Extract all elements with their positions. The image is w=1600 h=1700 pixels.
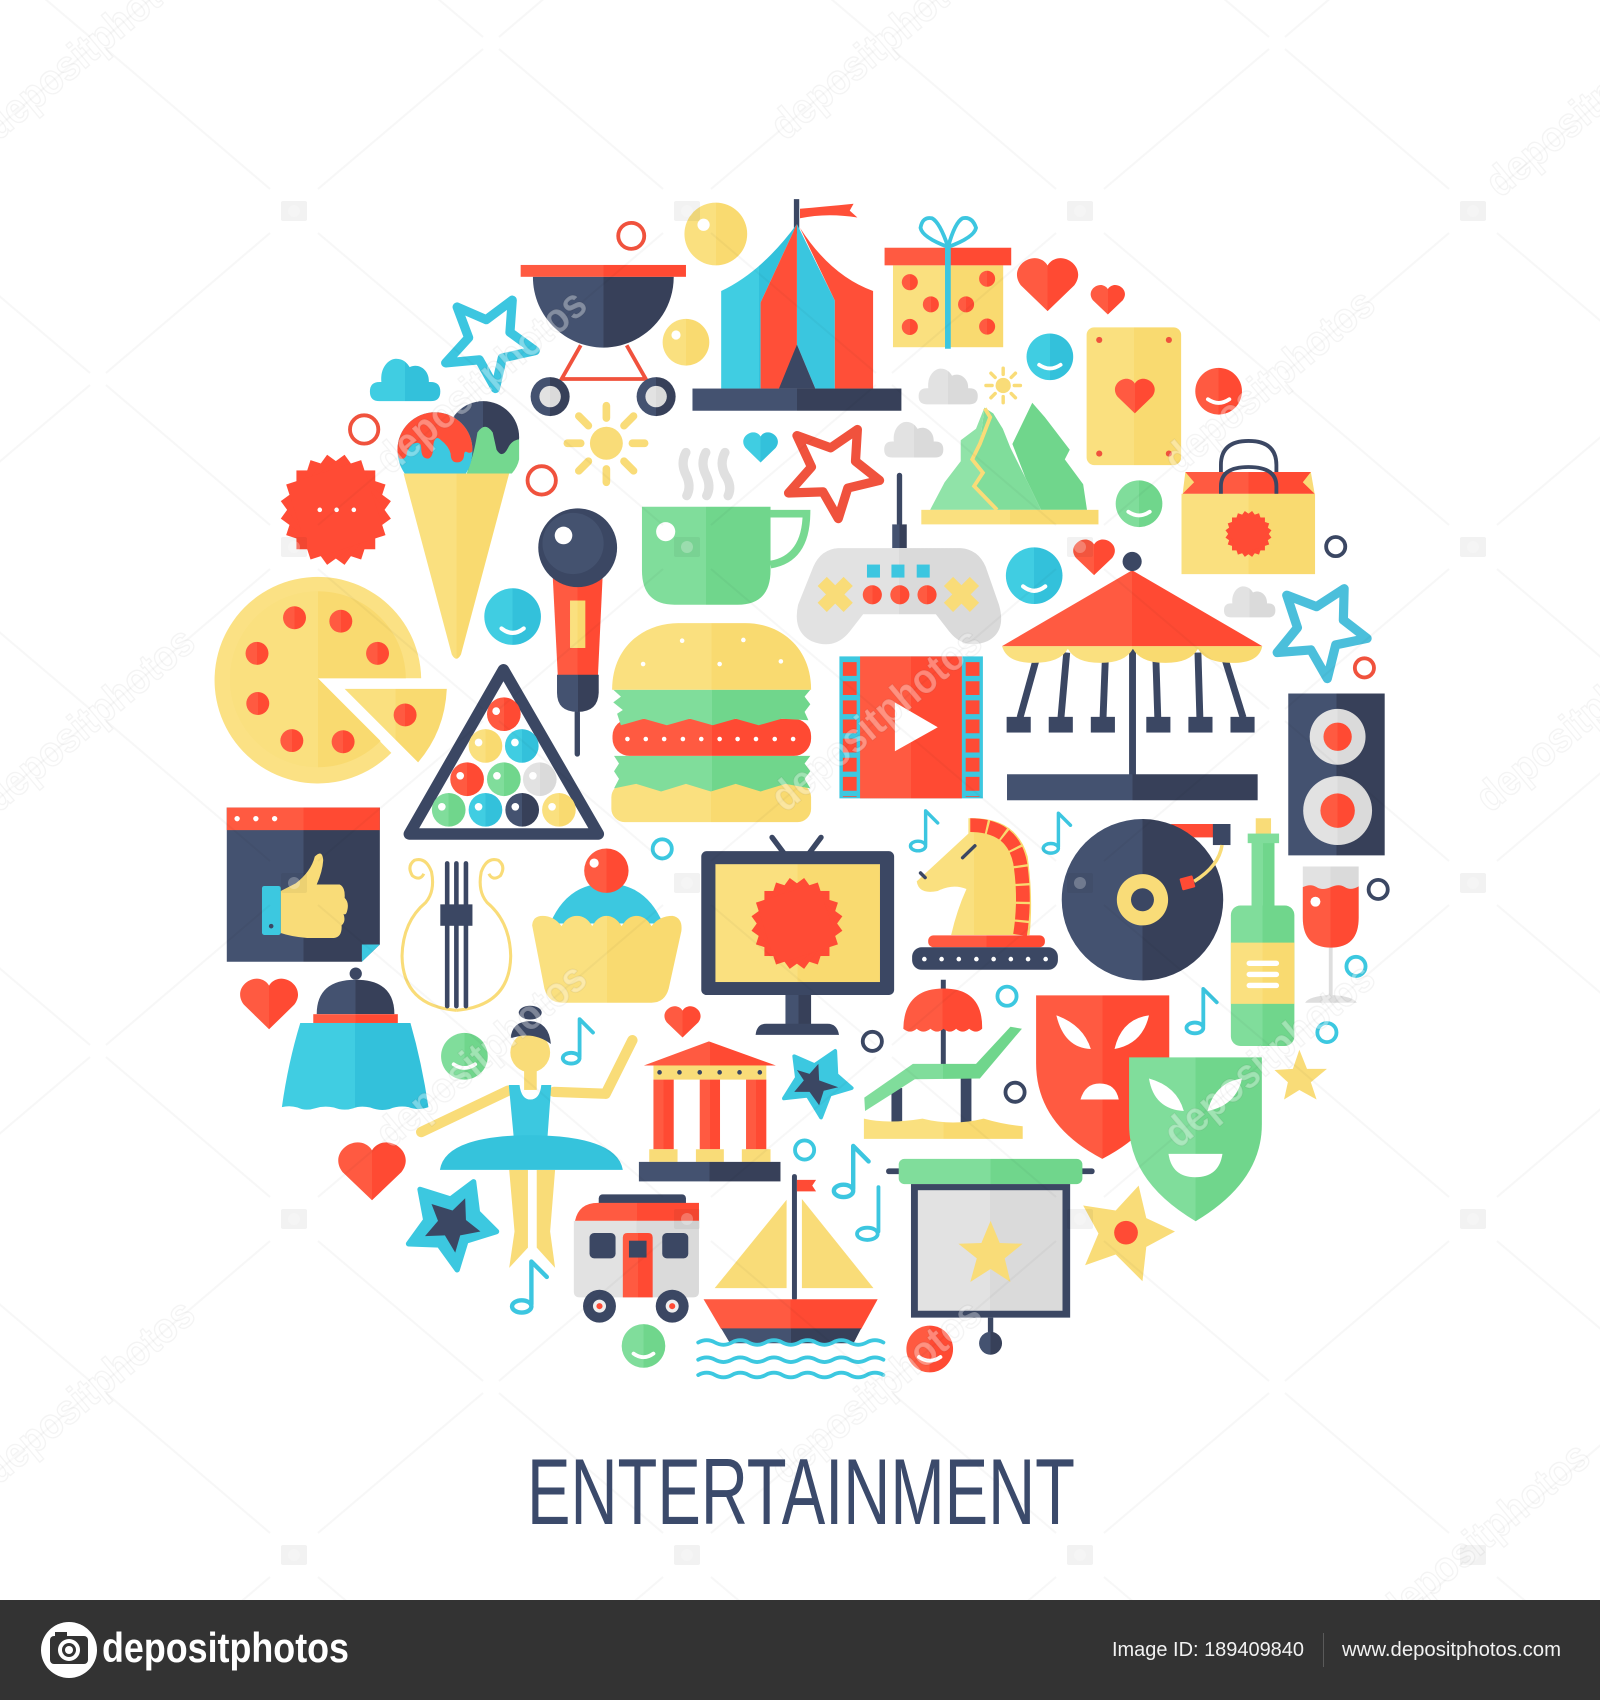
watermarks: depositphotos [761,1289,990,1492]
icon: playing card [1087,327,1181,465]
icon: blue smiley large [1006,547,1062,604]
icon: grey cloud [919,369,978,404]
icon: chess knight [912,818,1058,970]
icon: small red heart [1091,285,1125,315]
icon: temple [639,1041,780,1181]
icon: microphone [538,508,617,757]
footer logo icon [41,1622,97,1678]
icon: music note [563,1019,593,1064]
icon: blue star with navy centre [784,1051,852,1117]
icon: red star outline [789,429,880,519]
footer image id: Image ID: 189409840 [1112,1639,1304,1661]
icon: mountain [921,403,1098,524]
icon: small blue heart [743,432,778,463]
icon: waves [698,1340,883,1377]
ring: navy [1326,537,1345,556]
icon: music note lower [512,1262,547,1313]
icon: film strip with play button [839,656,983,798]
icon: small yellow ball [663,319,709,366]
icon: small yellow star [1274,1050,1327,1100]
icon: red heart small [664,1006,701,1038]
icon: green theatre mask [1129,1057,1262,1221]
icon: green smiley [1116,480,1162,527]
icon: cupcake [532,848,682,1003]
icon: red heart over carousel [1073,539,1115,575]
icon: small sun [986,368,1020,403]
icon: red smiley [1195,368,1242,415]
icon: yellow star with red dot [1083,1186,1175,1281]
icon: blue smiley [484,588,541,645]
watermarks: depositphotos [1154,279,1383,482]
icon: ballerina [421,1006,632,1268]
icon: green cup [642,507,807,605]
icon: lyre [402,860,511,1010]
watermarks: depositphotos [366,953,595,1156]
icon: wine bottle [1231,818,1294,1046]
icon: blue smiley [1027,333,1073,380]
watermarks: depositphotos [761,617,990,820]
icon: television [701,837,894,1035]
icon: browser window with thumbs up [227,808,380,962]
watermarks: depositphotos [1154,953,1383,1156]
icon: table with cloche [282,967,428,1110]
icon: carousel [1002,552,1262,800]
title: ENTERTAINMENT [527,1439,1075,1544]
ring: red [1355,658,1374,677]
ring: red left [350,415,378,444]
icon: gift box [885,218,1011,349]
icon: red theatre mask [1036,995,1169,1159]
icon: large red heart [1017,258,1078,311]
icon: burger [611,623,811,822]
icon: pizza [215,577,447,783]
ring: red centre [528,466,556,495]
footer bar [0,1600,1600,1700]
icon: red burst [281,455,391,565]
icon: blue star outline [446,300,535,389]
icon: music note [834,1146,869,1197]
watermarks: depositphotos [366,279,595,482]
icon: music note [1043,813,1070,853]
icon: shopping bag [1182,441,1315,574]
icon: music note [1186,989,1217,1033]
footer website: www.depositphotos.com [1341,1639,1561,1661]
icon: red smiley lower [906,1326,953,1372]
icon: circus tent [692,199,901,411]
icon: blue cloud [370,359,440,401]
icon: sun [567,406,645,482]
icon: speaker [1288,694,1385,855]
icon: sailboat [704,1174,878,1343]
icon: blue star outline right [1277,589,1367,679]
icon: blue star with navy centre [409,1182,497,1270]
icon: music note [910,811,938,851]
icon: red heart left [240,979,298,1029]
icon: steam [683,452,730,496]
icon: green smiley lower [622,1324,665,1368]
icon: vinyl record [1062,819,1230,981]
icon: music note without flag [857,1187,878,1240]
icon: projection screen [886,1159,1095,1355]
icon: red heart lower [338,1142,406,1200]
icon: ice cream cone [397,401,519,659]
icon: wine glass [1303,866,1359,1003]
icon: barbecue grill [521,265,686,416]
icon: caravan [574,1194,699,1323]
icon: yellow ball [684,203,747,265]
ring: blue [653,839,672,858]
footer logo text: depositphotos [102,1624,349,1671]
icon: grey cloud [1224,586,1275,617]
icon: billiard rack [409,670,598,834]
ring: red top [618,223,644,249]
icon: beach chair with umbrella [864,980,1023,1139]
icon: grey cloud [884,422,943,458]
rings: scattered [795,880,1388,1160]
icon: game controller [797,473,1001,644]
icon: green smiley [441,1033,488,1080]
